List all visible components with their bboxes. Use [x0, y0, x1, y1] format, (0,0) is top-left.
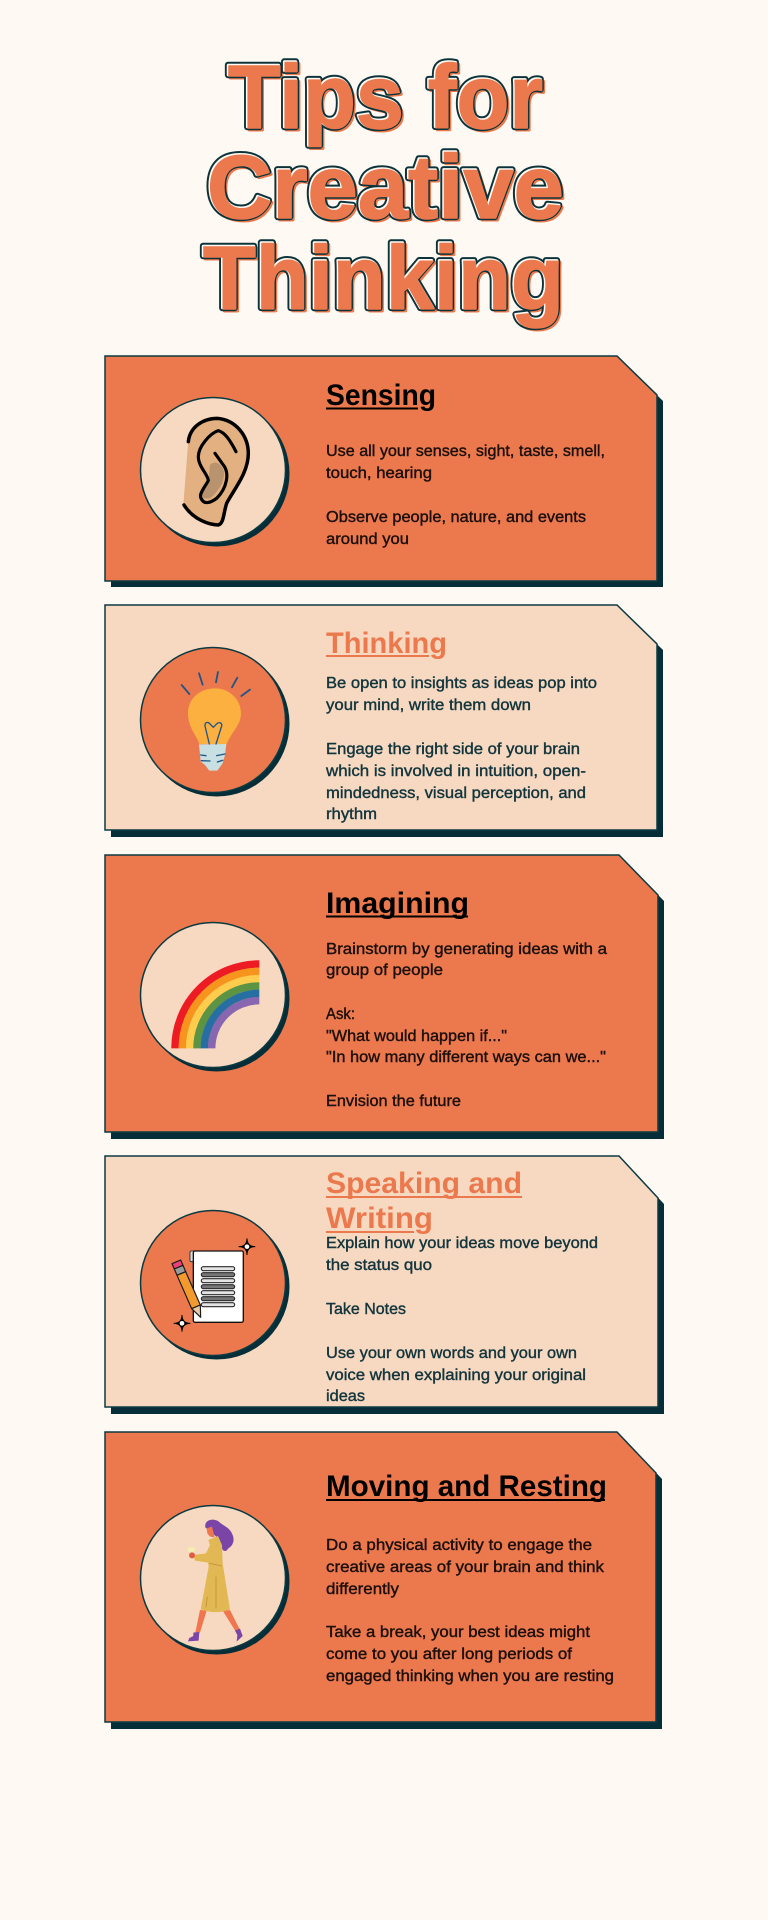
text: Thinking body: rhythm [326, 806, 377, 823]
text: Thinking body: your mind, write them down [326, 697, 531, 714]
text: Imagining body: Ask: [326, 1006, 355, 1023]
title: Thinking [203, 229, 564, 329]
panel: Speaking and Writing [105, 1156, 664, 1414]
text: Speaking and Writing body: ideas [326, 1388, 365, 1405]
text: Speaking and Writing body [326, 1235, 598, 1405]
text: Speaking and Writing body: Use your own words and your own [326, 1345, 577, 1362]
heading: Moving and Resting: Moving and Resting [326, 1470, 607, 1503]
text: Sensing body: Observe people, nature, and events [326, 509, 586, 526]
text: Moving and Resting body: come to you after long periods of [326, 1646, 573, 1663]
title: Thinking [202, 228, 563, 328]
title [202, 47, 566, 330]
text: Imagining body [326, 941, 607, 1110]
text: Speaking and Writing body: voice when explaining your original [326, 1367, 586, 1384]
title: Tips for [227, 47, 542, 147]
icon: rainbow in circle [140, 922, 290, 1072]
icon: walking woman in circle [140, 1506, 290, 1654]
text: Speaking and Writing body: the status quo [326, 1257, 432, 1274]
heading: Sensing: Sensing [326, 379, 436, 412]
title: Creative [206, 137, 563, 237]
text: Sensing body: Use all your senses, sight, taste, smell, [326, 443, 605, 460]
heading: Speaking and Writing: Writing [326, 1202, 433, 1235]
title: Tips for [230, 50, 544, 150]
title: Creative [206, 137, 563, 237]
heading: Speaking and Writing [326, 1167, 522, 1235]
text: Thinking body: which is involved in intuition, open- [325, 763, 586, 780]
text: Thinking body: mindedness, visual perception, and [326, 785, 586, 802]
text: Imagining body: "What would happen if..." [326, 1028, 507, 1045]
text: Moving and Resting body: differently [326, 1581, 399, 1598]
text: Thinking body [325, 675, 597, 823]
panel: Moving and Resting [105, 1432, 662, 1729]
icon: ear in circle [140, 398, 290, 546]
title: Creative [207, 138, 564, 238]
text: Moving and Resting body [326, 1537, 614, 1685]
text: Speaking and Writing body: Explain how your ideas move beyond [326, 1235, 598, 1252]
text: Sensing body: around you [326, 531, 409, 548]
text: Imagining body: group of people [326, 962, 443, 979]
text: Moving and Resting body: creative areas of your brain and think [326, 1559, 605, 1576]
text: Moving and Resting body: Take a break, your best ideas might [326, 1624, 591, 1641]
text: Imagining body: "In how many different ways can we..." [326, 1049, 606, 1066]
title: Thinking [202, 228, 563, 328]
panel: Thinking [105, 605, 663, 837]
text: Imagining body: Envision the future [326, 1093, 461, 1110]
text: Thinking body: Be open to insights as ideas pop into [326, 675, 597, 692]
title: Creative [208, 140, 566, 240]
panel: Sensing [105, 356, 663, 587]
panel: Imagining [105, 855, 664, 1139]
text: Imagining body: Brainstorm by generating ideas with a [326, 941, 607, 958]
heading: Thinking: Thinking [326, 627, 447, 660]
text: Sensing body [326, 443, 605, 548]
text: Speaking and Writing body: Take Notes [326, 1301, 406, 1318]
heading: Imagining: Imagining [326, 887, 469, 920]
text: Thinking body: Engage the right side of your brain [326, 741, 580, 758]
icon: pencil and paper in circle [140, 1210, 290, 1360]
text: Sensing body: touch, hearing [326, 465, 432, 482]
text: Moving and Resting body: Do a physical activity to engage the [326, 1537, 592, 1554]
heading: Speaking and Writing: Speaking and [326, 1167, 522, 1200]
icon: light bulb in circle [140, 648, 290, 796]
title: Tips for [227, 47, 542, 147]
title: Thinking [204, 230, 566, 330]
title: Tips for [228, 48, 543, 148]
text: Moving and Resting body: engaged thinking when you are resting [326, 1668, 614, 1685]
